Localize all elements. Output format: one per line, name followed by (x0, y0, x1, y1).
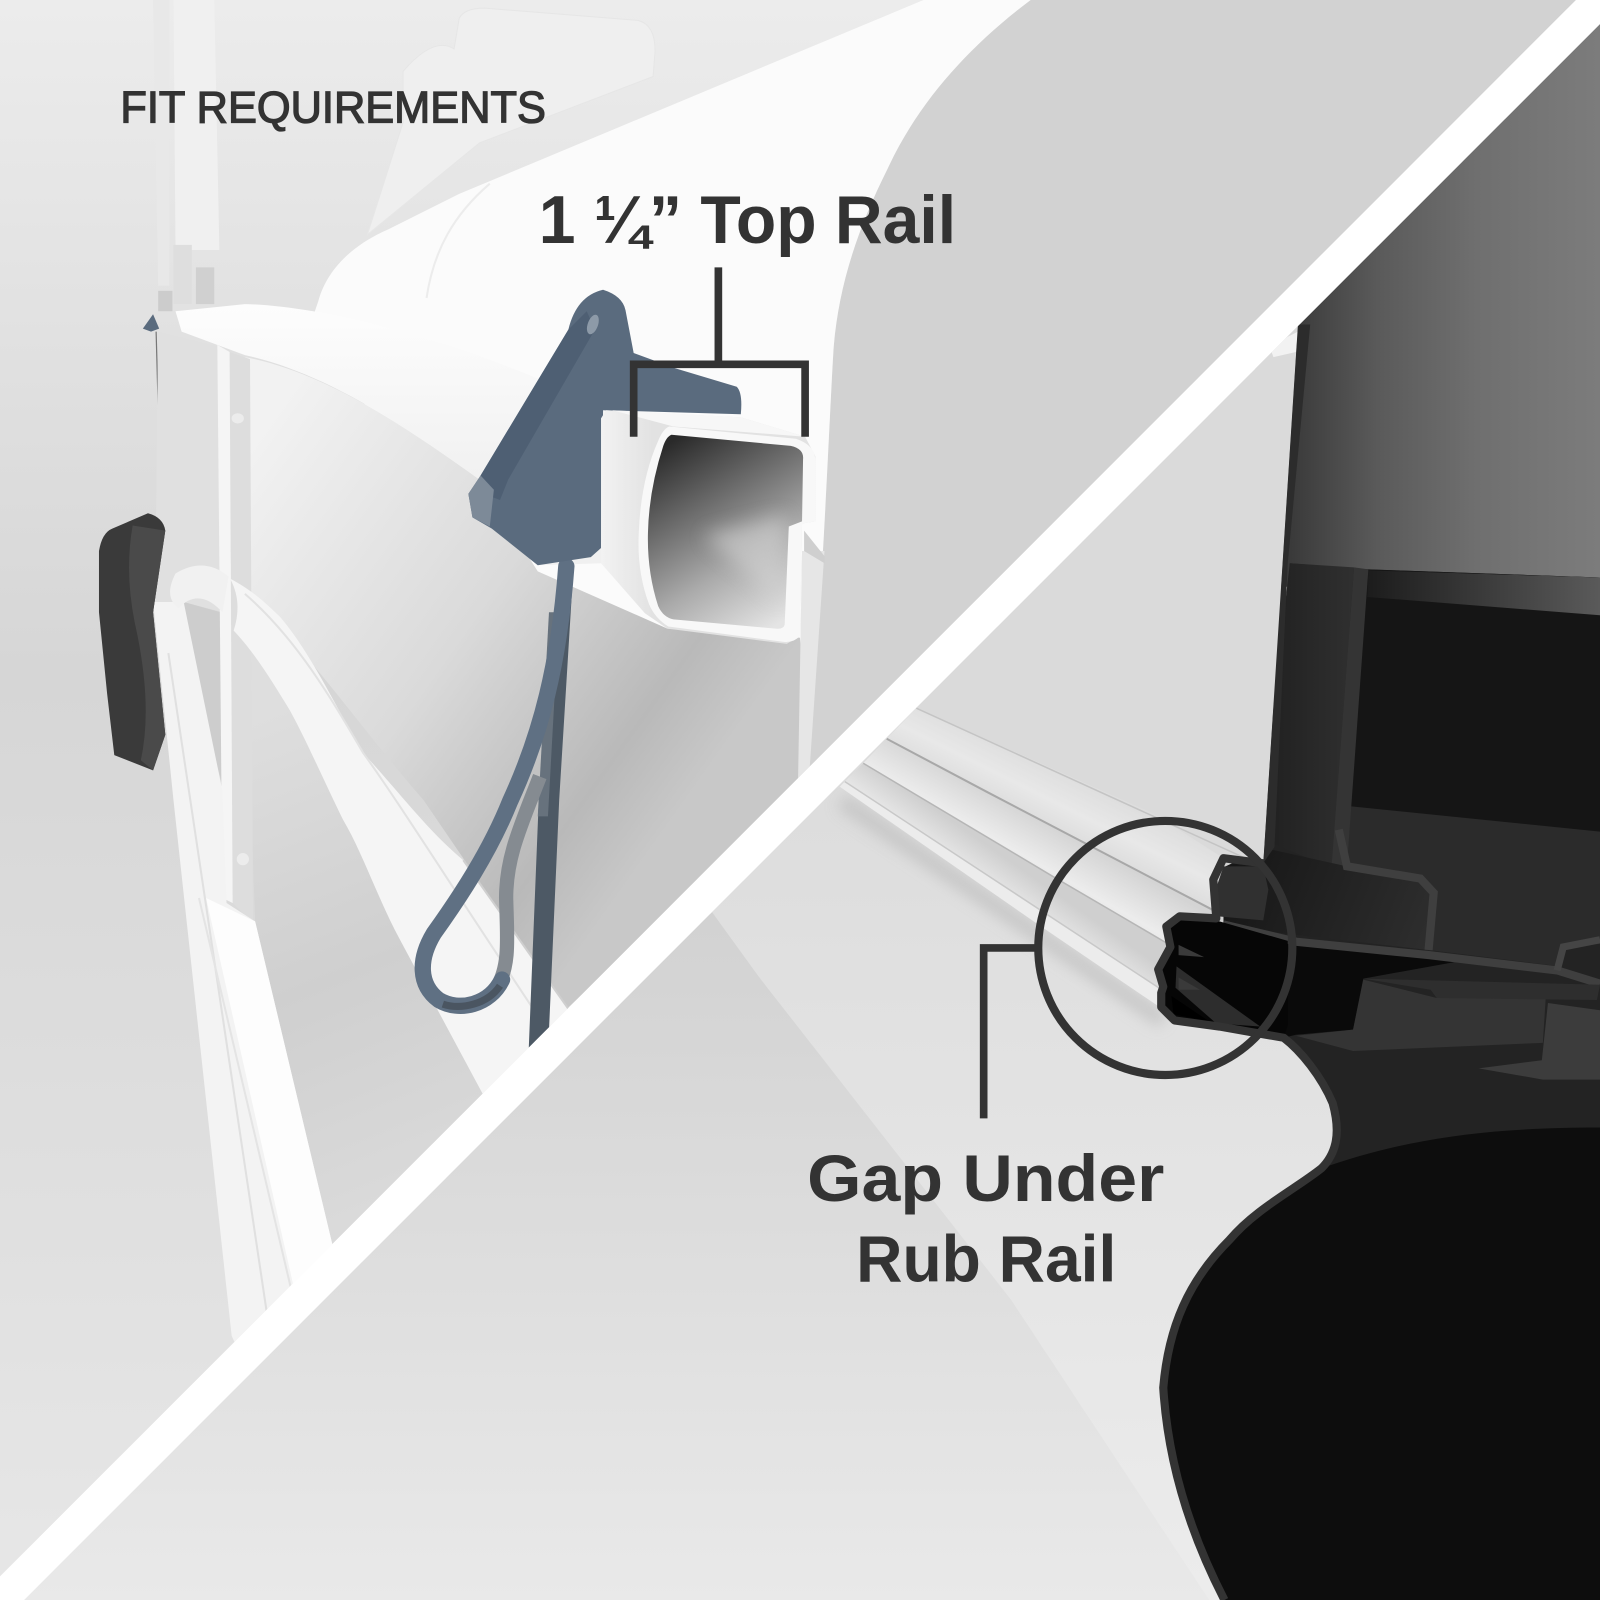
icon: top rail cross section (601, 410, 824, 644)
icon: blue clip (468, 290, 741, 565)
icon: rub rail profile (1158, 858, 1337, 1600)
icon: step recess (1223, 848, 1434, 950)
icon: hull top shade (1256, 326, 1298, 858)
icon: bracket one (1296, 979, 1600, 1051)
label: gap under rub rail: Gap Under (807, 1142, 1164, 1216)
icon: bottom grey wedge (763, 982, 967, 1255)
panel: white hull section (712, 326, 1333, 1255)
icon: small rail end clip (1270, 332, 1298, 357)
label: top rail size: 1 ¼” Top Rail (539, 183, 956, 258)
title: FIT REQUIREMENTS (120, 81, 546, 132)
icon: grey background behind hull (806, 0, 1600, 816)
icon: rail shadow (842, 801, 1163, 1020)
icon: stepped plate outline (1339, 830, 1434, 950)
icon: top rail sweep (176, 304, 607, 565)
icon: plate line (1223, 924, 1600, 984)
callout: gap magnifier circle (1038, 821, 1292, 1075)
icon: lower dark interior (1264, 568, 1600, 1166)
icon: upper dark interior (1255, 0, 1600, 587)
icon: plate notch (1557, 940, 1600, 970)
icon: rear grey window (184, 602, 221, 779)
panel: white cover sheet (315, 0, 1030, 642)
icon: seat seam (427, 184, 490, 298)
icon: vertical post (217, 345, 253, 923)
panel: rear side strip (158, 364, 162, 520)
icon: dark fender (99, 513, 165, 770)
icon: black hull interior (1163, 1128, 1600, 1600)
label: gap under rub rail: Rub Rail (856, 1223, 1116, 1297)
icon: lower plate void (1285, 944, 1454, 1036)
icon: black box opening (1352, 569, 1600, 832)
icon: hanging strap (423, 566, 573, 1053)
icon: faint bench backrest (369, 155, 462, 232)
icon: lower left white rail (153, 602, 334, 1347)
icon: upper hull panel (230, 357, 811, 1009)
icon: rub rail (230, 579, 577, 1107)
icon: hull right edge strip (798, 551, 824, 786)
icon: rub rail stripes (840, 708, 1265, 1008)
icon: bracket two (1479, 1003, 1600, 1080)
icon: lower hull panel (260, 901, 464, 1164)
icon: hull edge strip (1263, 324, 1310, 863)
icon: mast poles (142, 124, 220, 404)
icon: inner post (1303, 564, 1368, 866)
callout: gap leader line (984, 948, 1037, 1118)
icon: small arched rub rail (170, 566, 220, 609)
callout: top rail bracket (634, 267, 805, 437)
